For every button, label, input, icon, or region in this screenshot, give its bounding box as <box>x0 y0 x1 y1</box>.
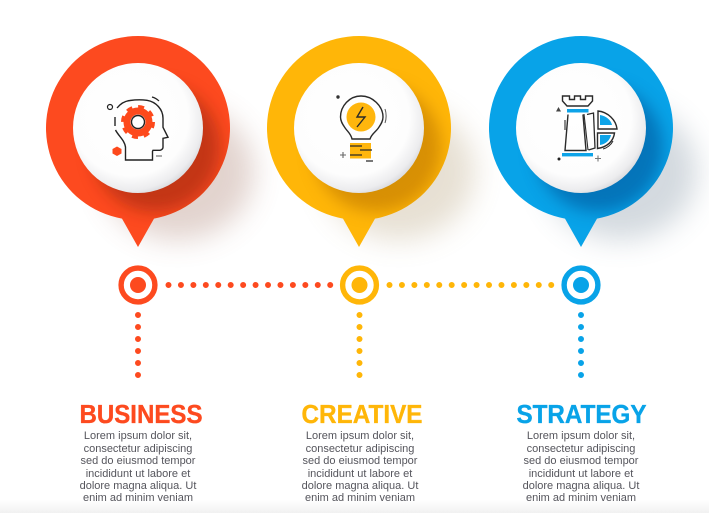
timeline marker: strategy <box>564 268 598 302</box>
text block: creative: Lorem ipsum dolor sit, <box>306 430 414 442</box>
text block: strategy: consectetur adipiscing <box>527 443 635 455</box>
text block: business: sed do eiusmod tempor <box>81 455 196 467</box>
icon: head with gear <box>108 97 168 160</box>
text block: creative: consectetur adipiscing <box>306 443 414 455</box>
text block: strategy: sed do eiusmod tempor <box>524 455 639 467</box>
text block: creative: sed do eiusmod tempor <box>303 455 418 467</box>
pin: creative <box>267 36 475 247</box>
heading: creative: CREATIVE <box>302 401 422 429</box>
text block: creative: dolore magna aliqua. Ut <box>302 480 418 492</box>
heading: business: BUSINESS <box>80 401 202 429</box>
heading: strategy: STRATEGY <box>516 401 646 429</box>
icon: chess rook with pie chart <box>556 96 617 162</box>
dotted drop line: strategy <box>578 315 584 376</box>
text block: business: enim ad minim veniam <box>83 492 193 504</box>
text block: creative <box>302 430 418 504</box>
dotted drop line: business <box>135 315 141 376</box>
dotted drop line: creative <box>356 315 362 376</box>
text block: business: consectetur adipiscing <box>84 443 192 455</box>
pin: strategy <box>489 36 697 247</box>
icon: light bulb <box>336 95 386 161</box>
text block: creative: enim ad minim veniam <box>305 492 415 504</box>
text block: strategy: dolore magna aliqua. Ut <box>523 480 639 492</box>
dotted connector: business to creative <box>168 282 331 288</box>
text block: strategy: Lorem ipsum dolor sit, <box>527 430 635 442</box>
text block: business: Lorem ipsum dolor sit, <box>84 430 192 442</box>
text block: business: dolore magna aliqua. Ut <box>80 480 196 492</box>
text block: strategy <box>523 430 639 504</box>
text block: creative: incididunt ut labore et <box>308 468 412 480</box>
text block: strategy: incididunt ut labore et <box>529 468 633 480</box>
timeline marker: creative <box>343 268 376 302</box>
text block: strategy: enim ad minim veniam <box>526 492 636 504</box>
timeline marker: business <box>121 268 155 302</box>
dotted connector: creative to strategy <box>390 282 552 288</box>
text block: business <box>80 430 196 504</box>
pin: business <box>46 36 254 247</box>
text block: business: incididunt ut labore et <box>86 468 190 480</box>
